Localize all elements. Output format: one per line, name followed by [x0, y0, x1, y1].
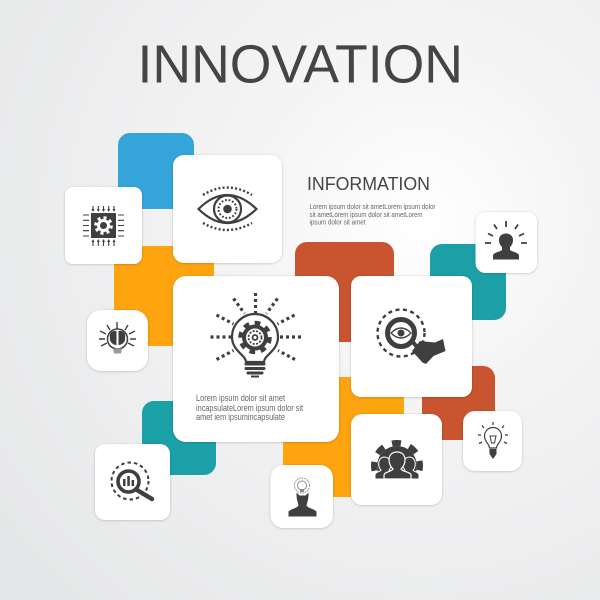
- block: teal right: [430, 244, 506, 320]
- icon: eye in magnifier held by hand: [378, 310, 446, 364]
- text block: main card body: incapsulateLorem ipsum dolor sit: [196, 403, 303, 413]
- panel: chip card: [65, 187, 142, 264]
- panel: brain bulb card: [87, 310, 148, 371]
- icon: magnifier with bar chart: [112, 462, 152, 500]
- text block: information body: sit ametLorem ipsum dolor sit ametLorem: [310, 210, 422, 219]
- block: red upper: [295, 242, 394, 342]
- text block: information body: [310, 202, 436, 226]
- text block: main card body: Lorem ipsum dolor sit amet: [196, 393, 285, 403]
- text block: information body: ipsum dolor sit amet: [310, 218, 366, 226]
- panel: pencil bulb card: [463, 411, 522, 471]
- heading: information: INFORMATION: [307, 174, 430, 194]
- block: blue: [118, 133, 194, 209]
- title: INNOVATION: [138, 35, 463, 95]
- block: orange upper: [114, 246, 214, 346]
- text block: information body: Lorem ipsum dolor sit ametLorem ipsum dolor: [310, 202, 436, 211]
- panel: eye magnifier card: [351, 276, 472, 397]
- panel: person with idea card: [270, 465, 333, 528]
- icon: team in gear: [368, 443, 426, 499]
- block: red lower: [422, 366, 495, 440]
- icon: chip with gear: [83, 206, 124, 246]
- icon: brain bulb: [99, 322, 136, 354]
- block: orange lower: [283, 377, 404, 497]
- icon: lightbulb with gear: [210, 293, 301, 376]
- panel: team gear card: [351, 414, 442, 505]
- icon: lightbulb with pencil: [478, 422, 508, 459]
- icon: eye: [198, 188, 256, 230]
- panel: search chart card: [95, 444, 170, 520]
- block: teal left: [142, 401, 216, 475]
- text block: main card body: [196, 393, 303, 422]
- panel: eye card: [173, 155, 282, 263]
- panel: info person card: [476, 212, 537, 273]
- icon: person with rays: [485, 221, 527, 260]
- text block: main card body: amet iem ipsumincapsulate: [196, 412, 285, 422]
- icon: person with lightbulb head: [288, 478, 316, 516]
- panel: main lightbulb card: [173, 276, 339, 442]
